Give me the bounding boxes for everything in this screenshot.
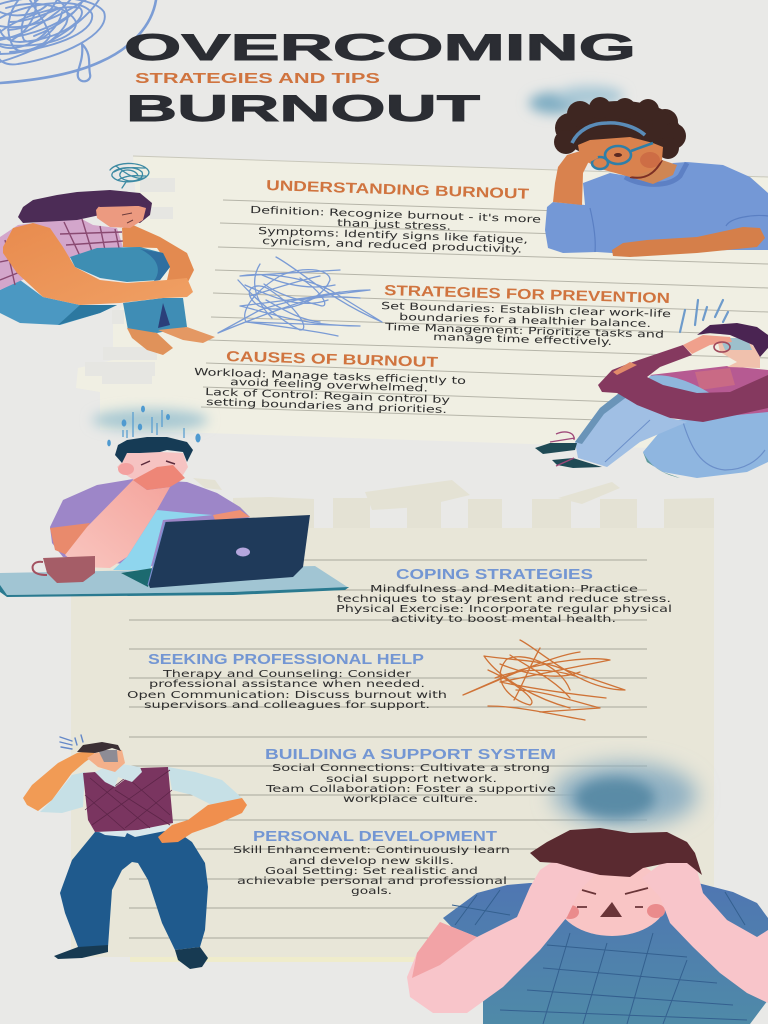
body text: than just stress. (337, 218, 451, 233)
body text: Symptoms: Identify signs like fatigue, (258, 226, 528, 246)
heading: PERSONAL DEVELOPMENT (253, 829, 497, 845)
coffee cup (33, 556, 95, 583)
scribble: marks above right figure (680, 300, 728, 332)
face (117, 452, 188, 482)
near leg (575, 390, 687, 467)
body text: setting boundaries and priorities. (206, 397, 447, 416)
section: strategies for prevention (381, 283, 671, 348)
body text: Mindfulness and Meditation: Practice (370, 584, 638, 595)
body text: supervisors and colleagues for support. (144, 700, 430, 711)
title (124, 26, 636, 129)
neck (630, 160, 677, 184)
body text (265, 763, 556, 805)
face (96, 205, 146, 228)
top (0, 218, 123, 290)
lower body (643, 412, 768, 478)
hair (697, 323, 768, 357)
scribble: orange (463, 640, 625, 720)
glasses (714, 342, 730, 352)
cloud and rain above laptop man (92, 406, 208, 446)
body text: social support network. (326, 774, 497, 785)
logo (236, 548, 250, 556)
shirt (443, 883, 768, 1024)
top (650, 366, 768, 445)
arm (65, 480, 170, 568)
small hand (613, 362, 637, 375)
hand (683, 335, 732, 354)
face (87, 750, 125, 772)
pants (60, 830, 208, 950)
section: building a support system (265, 747, 556, 805)
body (50, 479, 250, 567)
body text: workplace culture. (343, 794, 478, 805)
body text: manage time effectively. (433, 332, 612, 348)
body text: Social Connections: Cultivate a strong (272, 763, 550, 774)
body text: Time Management: Prioritize tasks and (383, 322, 664, 341)
section: seeking professional help (127, 652, 447, 711)
cloud behind glasses figure (529, 86, 624, 114)
body text: Lack of Control: Regain control by (205, 387, 450, 406)
body text: Set Boundaries: Establish clear work-life (381, 301, 671, 320)
heading: CAUSES OF BURNOUT (226, 349, 438, 371)
shoes (535, 443, 577, 454)
far leg (635, 375, 720, 420)
panel: upper note paper (76, 156, 768, 452)
face (578, 137, 663, 177)
panel: lower note paper (71, 478, 714, 962)
body text (233, 845, 510, 897)
scribble: small teal knot (110, 163, 149, 188)
body text: professional assistance when needed. (149, 679, 425, 690)
body text: boundaries for a healthier balance. (399, 312, 651, 330)
heading: UNDERSTANDING BURNOUT (266, 178, 529, 203)
subtitle: STRATEGIES AND TIPS (135, 70, 380, 87)
lower arm (612, 227, 765, 257)
body text (194, 367, 466, 416)
face (717, 338, 760, 363)
shoes (54, 945, 108, 959)
raised arm (553, 149, 598, 205)
body text: goals. (351, 886, 392, 897)
body text: avoid feeling overwhelmed. (230, 377, 428, 395)
section: causes of burnout (194, 349, 466, 416)
scribble: top-left blue tangle (0, 0, 156, 83)
body text: achievable personal and professional (237, 876, 507, 887)
arms (23, 750, 95, 811)
title line: overcoming: OVERCOMING (124, 26, 636, 68)
sweater (545, 162, 768, 253)
title line: burnout: BURNOUT (126, 87, 480, 129)
headband (572, 123, 645, 143)
heading: STRATEGIES FOR PREVENTION (384, 283, 670, 307)
lower leg (123, 298, 187, 333)
body text (127, 669, 447, 711)
laptop (121, 515, 310, 588)
cloud above bottom man (553, 763, 697, 827)
body text: Team Collaboration: Foster a supportive (265, 784, 556, 795)
far arm (122, 225, 194, 282)
heading: BUILDING A SUPPORT SYSTEM (265, 747, 556, 763)
heading: COPING STRATEGIES (396, 567, 593, 583)
face (556, 860, 668, 936)
neck (727, 355, 760, 368)
body text: and develop new skills. (289, 856, 454, 867)
figure: standing man with hand on forehead (23, 735, 247, 969)
hair (530, 828, 702, 877)
figure: person sitting holding head (535, 323, 768, 478)
section: coping strategies (336, 567, 672, 625)
pants (0, 280, 117, 325)
figure: man with laptop at desk (0, 437, 349, 597)
figure: man with glasses touching forehead (545, 97, 768, 257)
table (0, 566, 349, 597)
figure: man at bottom holding head (407, 828, 768, 1024)
collar (95, 763, 142, 787)
near arm (3, 223, 193, 305)
knee (70, 247, 170, 282)
body text: Open Communication: Discuss burnout with (127, 690, 447, 701)
body text: Skill Enhancement: Continuously learn (233, 845, 510, 856)
hair (554, 97, 686, 159)
body text: Goal Setting: Set realistic and (265, 866, 478, 877)
body text: Therapy and Counseling: Consider (162, 669, 412, 680)
hair (98, 750, 118, 762)
body text: activity to boost mental health. (391, 614, 616, 625)
glasses (592, 143, 653, 169)
sleeves (40, 772, 85, 813)
body text: techniques to stay present and reduce stress. (337, 594, 671, 605)
body text: Definition: Recognize burnout - it's more (250, 205, 541, 226)
shirt hem (95, 825, 172, 837)
figure: woman sitting hugging knees (0, 190, 215, 355)
vest (83, 767, 173, 832)
arms (407, 860, 597, 1013)
body text (250, 205, 541, 256)
eyes and brows (577, 888, 648, 907)
body text: Workload: Manage tasks efficiently to (194, 367, 466, 387)
stress marks (60, 735, 83, 749)
body text: cynicism, and reduced productivity. (262, 236, 522, 256)
section: personal development (233, 829, 510, 897)
body text (381, 301, 671, 348)
hair (18, 190, 152, 223)
section: understanding burnout (250, 178, 541, 256)
scribble: mid blue (218, 257, 382, 336)
body text: Physical Exercise: Incorporate regular physical (336, 604, 672, 615)
arm (598, 345, 768, 422)
feet (127, 328, 173, 355)
body text (336, 584, 672, 625)
hand on face (133, 465, 185, 490)
nose (600, 902, 622, 917)
heading: SEEKING PROFESSIONAL HELP (148, 652, 424, 668)
hair (115, 437, 193, 463)
